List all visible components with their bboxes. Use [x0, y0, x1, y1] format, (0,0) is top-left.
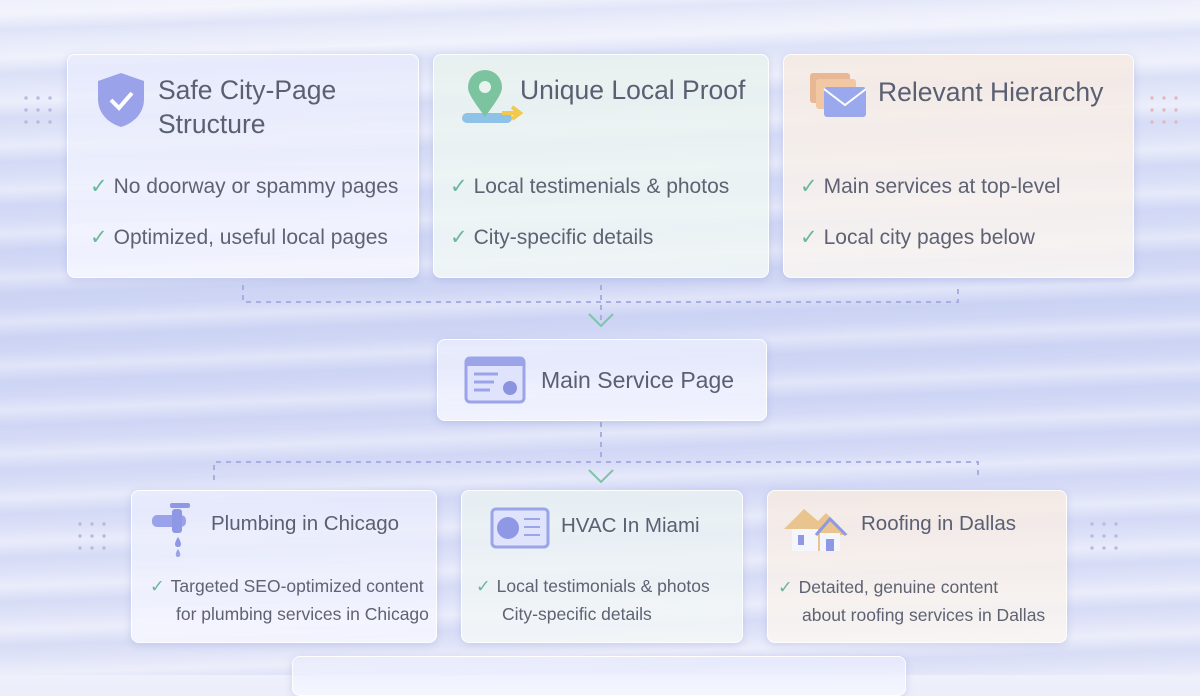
list: City-specific details: [502, 604, 652, 624]
list: [150, 576, 429, 624]
heading: Plumbing in Chicago: [211, 512, 399, 535]
list: ✓ No doorway or spammy pages: [90, 175, 398, 198]
icon: webpage: [464, 356, 526, 404]
icon: hvac unit: [490, 508, 550, 548]
heading: Unique Local Proof: [520, 75, 745, 105]
panel: relevant hierarchy: [783, 54, 1134, 278]
panel: main service page: [437, 339, 767, 421]
list: about roofing services in Dallas: [802, 605, 1045, 625]
list: ✓ Targeted SEO-optimized content: [150, 576, 424, 596]
icon: map pin: [462, 70, 524, 123]
heading: Relevant Hierarchy: [878, 77, 1103, 107]
panel: unique local proof: [433, 54, 769, 278]
list: for plumbing services in Chicago: [176, 604, 429, 624]
list: [476, 576, 710, 624]
list: ✓ Detaited, genuine content: [778, 577, 998, 597]
panel: relevant hierarchy: ✓ Local city pages below: [800, 226, 1035, 249]
heading: Safe City-Page: [158, 75, 336, 105]
heading: [158, 75, 336, 139]
list: ✓ Local testimenials & photos: [450, 175, 729, 198]
panel: roofing in dallas: [767, 490, 1067, 643]
list: [778, 577, 1045, 625]
list: ✓ Main services at top-level: [800, 175, 1061, 198]
list: ✓ Local testimonials & photos: [476, 576, 710, 596]
icon: shield: [98, 73, 144, 127]
heading: Structure: [158, 109, 266, 139]
panel: bottom partial card: [292, 656, 906, 696]
heading: HVAC In Miami: [561, 514, 700, 537]
panel: plumbing in chicago: [131, 490, 437, 643]
icon: house: [784, 509, 848, 551]
heading: Main Service Page: [541, 367, 734, 393]
icon: folders: [810, 73, 866, 117]
panel: unique local proof: ✓ City-specific details: [450, 226, 653, 249]
panel: hvac in miami: [461, 490, 743, 643]
panel: safe city-page structure: ✓ Optimized, useful local pages: [90, 226, 388, 249]
heading: Roofing in Dallas: [861, 512, 1016, 535]
panel: safe city-page structure: [67, 54, 419, 278]
icon: faucet: [152, 503, 190, 557]
